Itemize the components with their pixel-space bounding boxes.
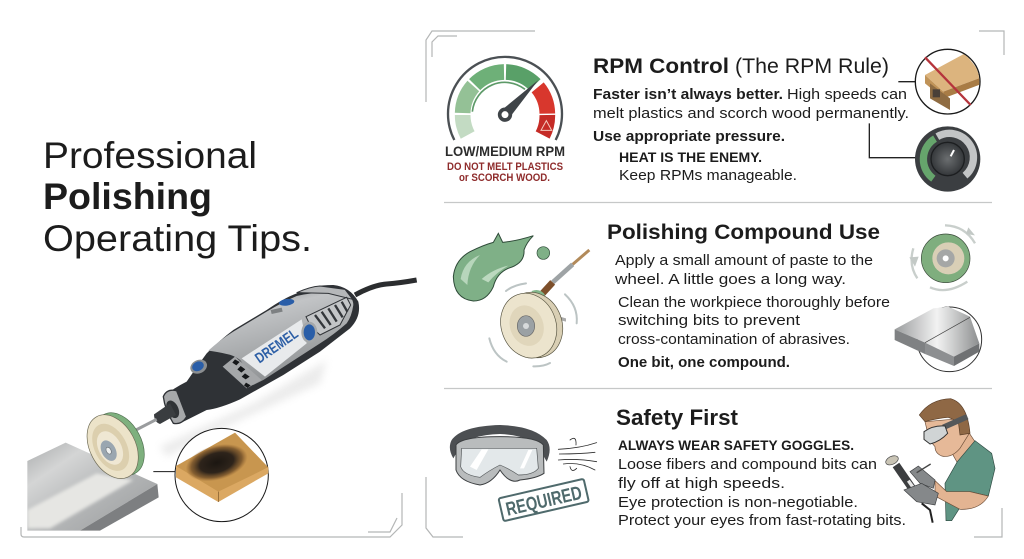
text block: safety first: ALWAYS WEAR SAFETY GOGGLES. (618, 437, 854, 453)
text block: polishing compound use: wheel. A little goes a long way. (614, 271, 846, 288)
nose and collet (134, 390, 187, 431)
icon: crossed-out wood (915, 49, 983, 114)
metal block (27, 443, 159, 531)
power cord (355, 280, 417, 295)
divider (444, 388, 992, 390)
text block: RPM control: HEAT IS THE ENEMY. (619, 149, 762, 165)
goggle strap (943, 417, 967, 427)
text block: safety first: Protect your eyes from fast-rotating bits. (618, 512, 906, 529)
gauge: low/medium RPM (445, 57, 565, 184)
text block: RPM control: High speeds can (787, 86, 907, 103)
icon: speed dial (915, 126, 980, 192)
shirt (945, 441, 995, 521)
icon: clean metal plate (895, 307, 982, 372)
illustration: goggles and required stamp (450, 425, 597, 521)
compound blob (453, 233, 550, 301)
panel: right frame brackets (426, 31, 1004, 537)
text block: polishing compound use (607, 221, 890, 371)
text block: polishing compound use: cross-contamination of abrasives. (618, 331, 850, 348)
text block: polishing compound use: Apply a small amount of paste to the (615, 252, 873, 269)
text block: RPM control: (The RPM Rule) (735, 55, 889, 78)
brush (532, 250, 589, 299)
text block: polishing compound use: switching bits to prevent (618, 312, 801, 329)
handheld tool (884, 454, 933, 523)
required stamp: REQUIRED (504, 483, 584, 521)
wheel (492, 284, 572, 366)
icons: compound wheel and clean metal (895, 225, 982, 372)
text block: RPM control: Faster isn’t always better. (593, 86, 783, 103)
gauge caption: LOW/MEDIUM RPM (445, 143, 565, 159)
needle hub (500, 109, 510, 120)
text block: safety first: Loose fibers and compound bits can (618, 456, 877, 473)
icons: scorched wood and speed dial (869, 49, 983, 192)
head (925, 418, 969, 456)
tool body (134, 285, 359, 431)
debris lines (558, 438, 597, 470)
inner scale arc (472, 82, 525, 112)
gauge caption (445, 143, 565, 184)
text block: polishing compound use: One bit, one compound. (618, 354, 790, 371)
neck (952, 434, 975, 462)
connector lines (869, 82, 916, 158)
motion lines (489, 283, 577, 366)
illustration: technician wearing goggles (884, 399, 995, 523)
gauge caption: or SCORCH WOOD. (459, 172, 550, 184)
text block: safety first: Eye protection is non-negotiable. (618, 494, 858, 511)
tool shadow (160, 360, 327, 457)
text block: RPM control: melt plastics and scorch wood permanently. (593, 105, 909, 122)
gauge segments (463, 72, 547, 135)
illustration: compound and brush on wheel (453, 233, 589, 366)
title: Polishing (43, 176, 212, 217)
text block: safety first: fly off at high speeds. (618, 475, 785, 492)
front vents (223, 357, 262, 388)
text block: RPM control: Use appropriate pressure. (593, 128, 785, 145)
text block: safety first: Safety First (616, 405, 739, 430)
illustration: rotary tool polishing metal (27, 280, 417, 531)
arm (935, 481, 988, 509)
panel: left frame bracket (21, 493, 402, 537)
title: Professional (43, 135, 257, 176)
goggle lens (924, 426, 948, 444)
text block: polishing compound use: Clean the workpiece thoroughly before (618, 294, 890, 311)
brand name: DREMEL (253, 326, 302, 367)
rear vent ribs (306, 297, 351, 335)
pencil (917, 464, 931, 473)
title (43, 135, 312, 259)
needle (501, 80, 538, 118)
gauge outer arc (448, 57, 562, 140)
text block: RPM control: RPM Control (593, 55, 729, 78)
text block: RPM control (593, 55, 909, 184)
blue buttons (188, 298, 317, 376)
gauge caption: DO NOT MELT PLASTICS (447, 161, 563, 173)
inset: scorched wood (153, 428, 268, 522)
warning triangle (541, 121, 552, 130)
goggles (450, 425, 550, 485)
hair (919, 399, 970, 435)
icon: loaded wheel (909, 225, 975, 290)
title: Operating Tips. (43, 218, 312, 259)
text block: safety first (616, 405, 906, 529)
buffing wheel (77, 404, 154, 487)
text block: polishing compound use: Polishing Compound Use (607, 221, 880, 244)
divider (444, 202, 992, 204)
gloves (904, 466, 938, 505)
label plate (242, 319, 307, 377)
text block: RPM control: Keep RPMs manageable. (619, 167, 797, 184)
